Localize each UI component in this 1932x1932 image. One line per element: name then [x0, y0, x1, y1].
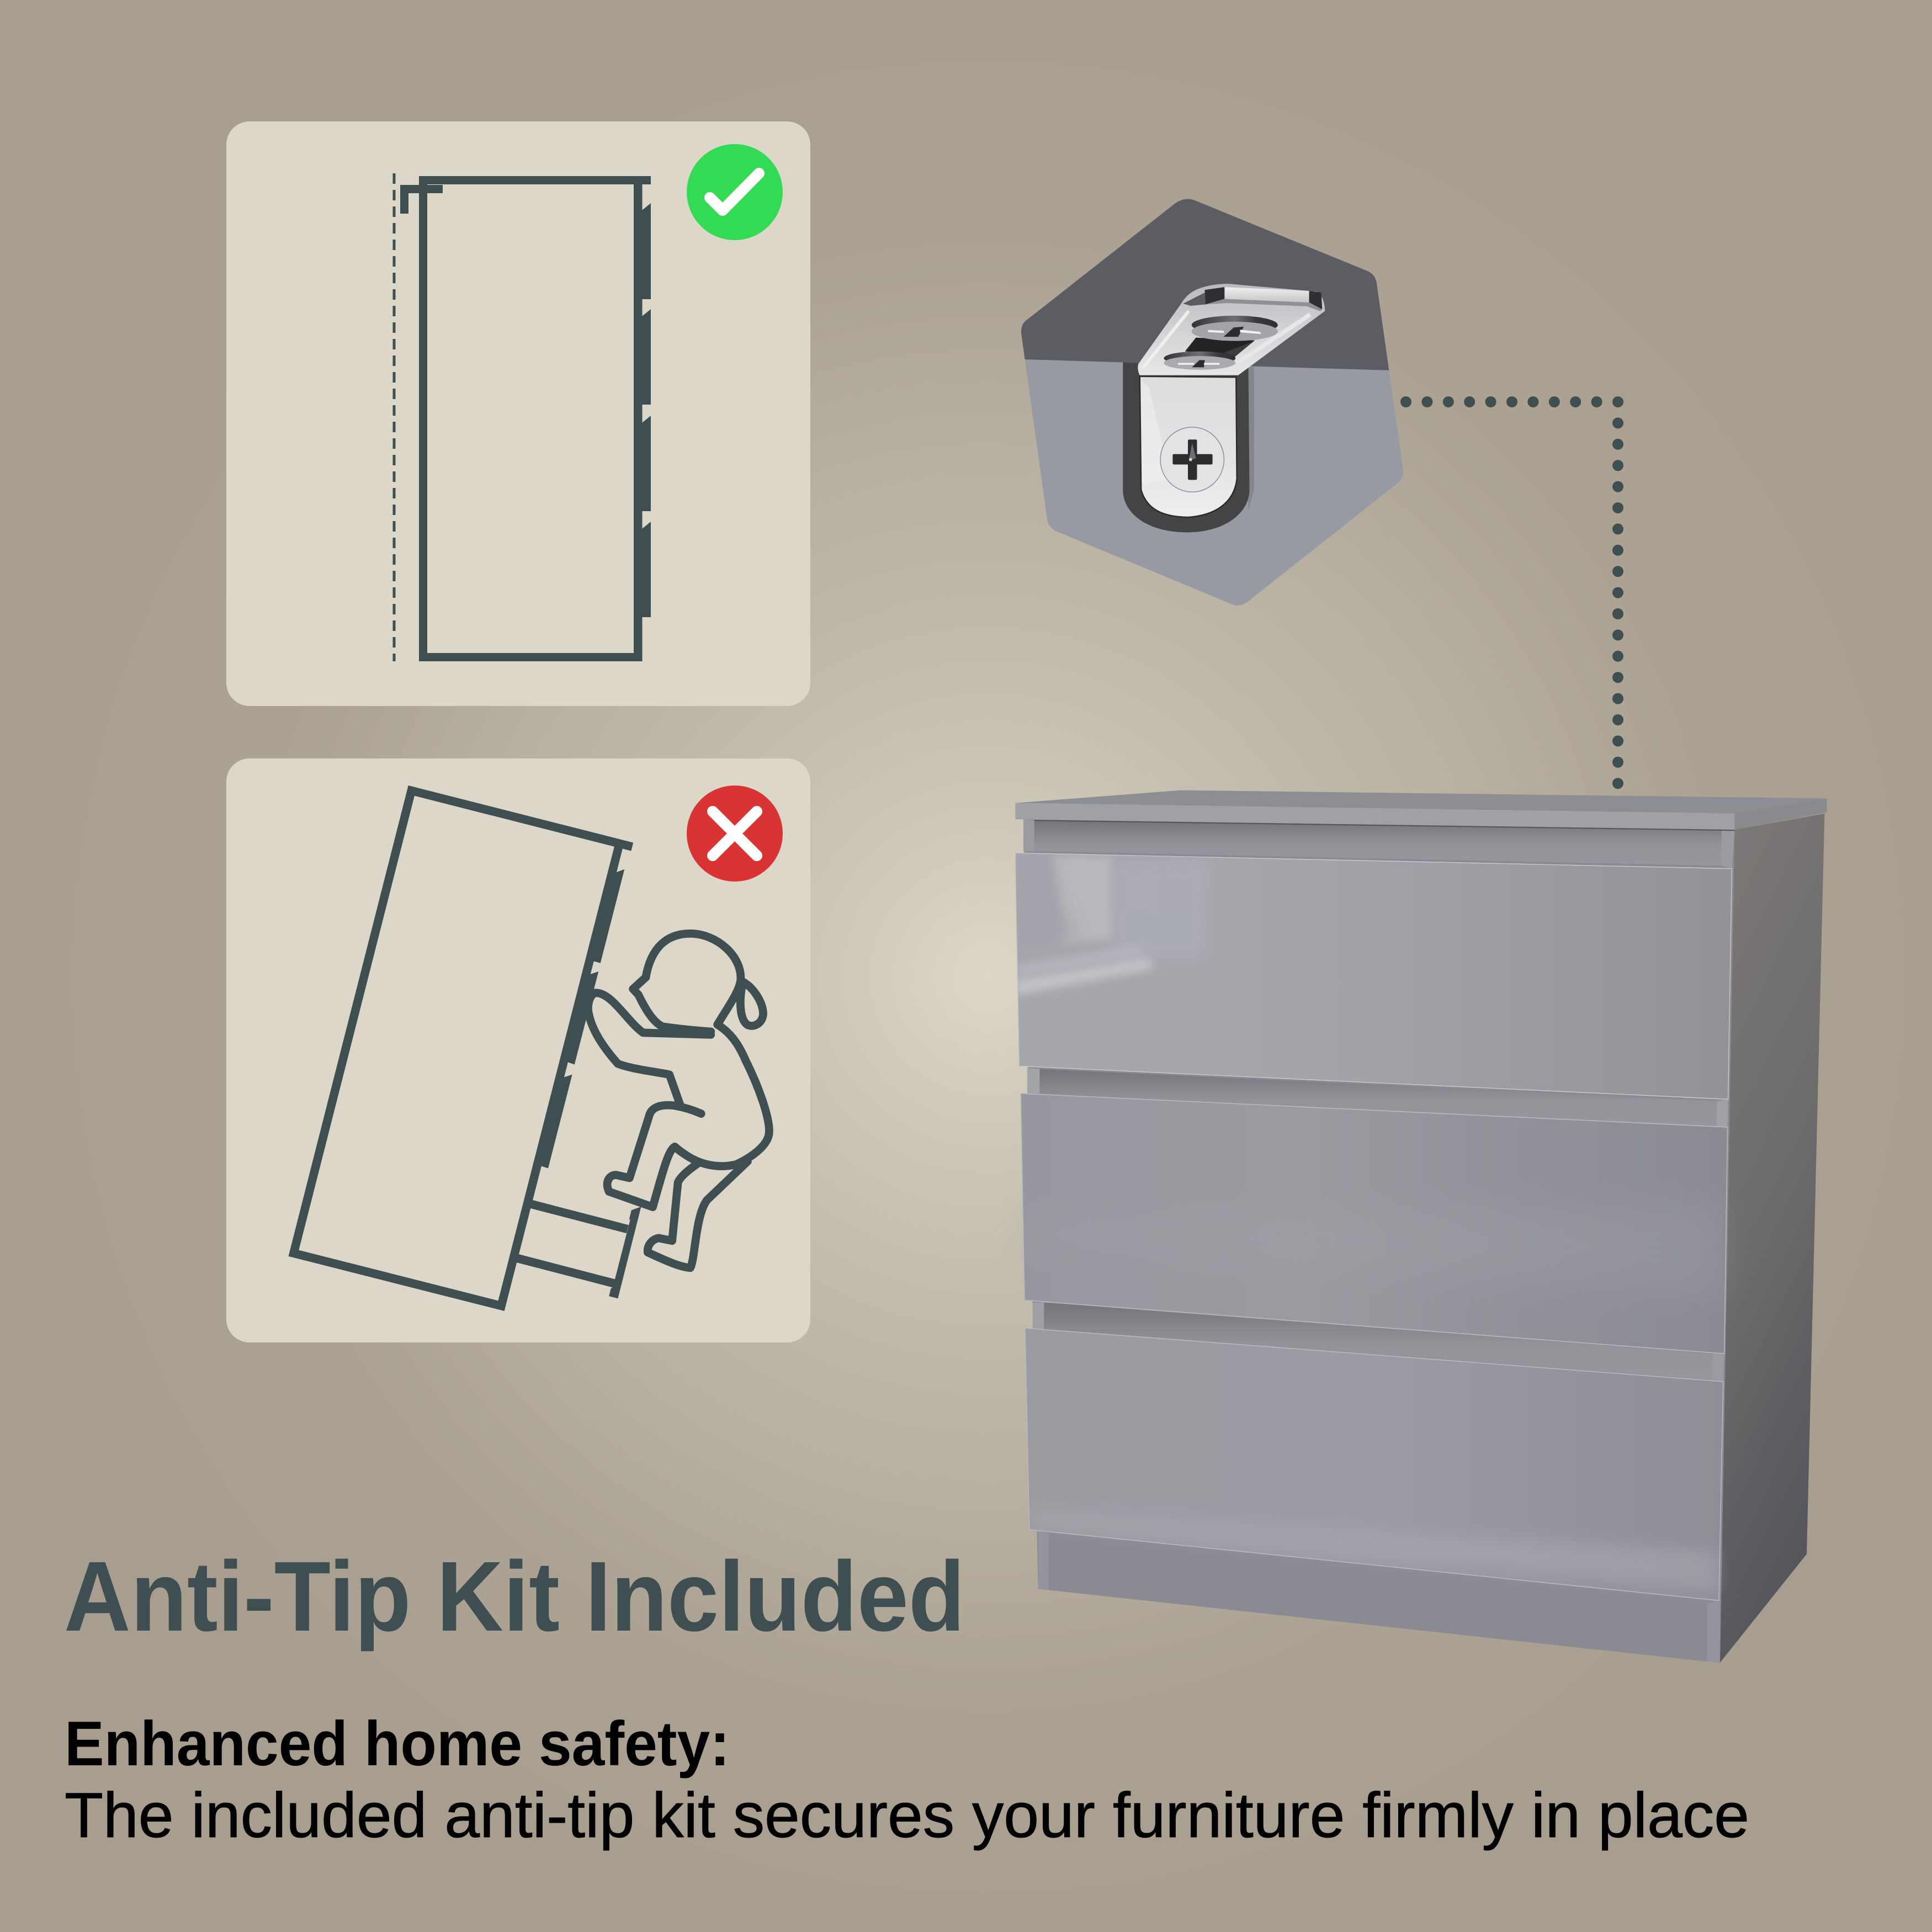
drawer 3	[1025, 1328, 1723, 1601]
panel: incorrect tipping cabinet	[226, 758, 810, 1342]
drawer 1	[1015, 853, 1732, 1099]
flange	[1138, 284, 1325, 375]
main screw	[1160, 427, 1224, 492]
hexagon detail: anti-tip bracket	[1021, 199, 1403, 606]
drawer 2	[1021, 1094, 1728, 1354]
bracket rim	[1183, 287, 1322, 311]
panel: correct anchored cabinet	[226, 121, 810, 706]
product: three-drawer dresser	[1015, 790, 1827, 1663]
icon: red cross badge	[687, 785, 783, 882]
subheading: Enhanced home safety:	[65, 1709, 730, 1779]
icon: anchored cabinet outline	[400, 176, 651, 661]
body text: The included anti-tip kit secures your furniture firmly in place	[65, 1780, 1749, 1851]
drawer 1 gloss reflection	[1016, 856, 1214, 995]
top slab	[1015, 790, 1827, 830]
upper screw	[1192, 316, 1278, 341]
lower screw	[1164, 352, 1235, 370]
icon: green check badge	[687, 144, 783, 240]
dotted connector line	[1406, 402, 1618, 785]
title: Anti-Tip Kit Included	[64, 1541, 965, 1652]
icon: tipping cabinet and climbing child	[294, 790, 769, 1306]
dashed wall line	[393, 173, 395, 661]
